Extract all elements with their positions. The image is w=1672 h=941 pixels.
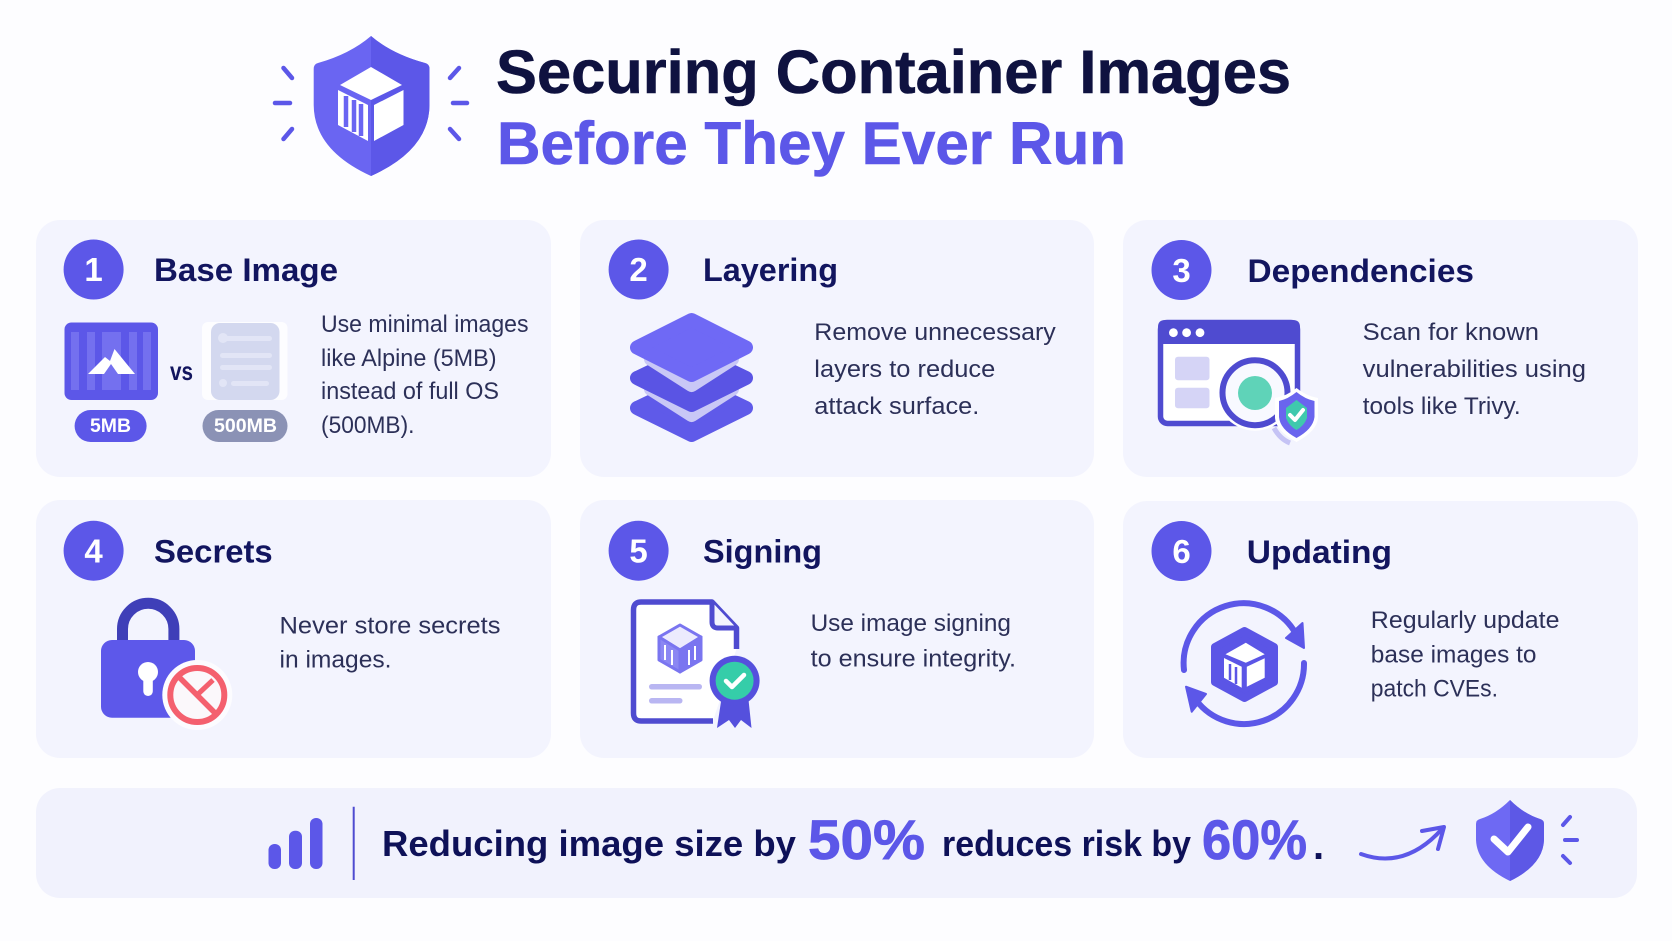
badge: 5MB: 5MB xyxy=(90,416,131,437)
text: updating tip: patch CVEs. xyxy=(1371,676,1498,703)
text: secrets tip: Never store secrets xyxy=(280,612,500,640)
text: signing tip: to ensure integrity. xyxy=(811,646,1016,673)
text: secrets tip xyxy=(280,612,500,674)
step number 3: 3 xyxy=(1172,252,1191,289)
header icon: shield with container xyxy=(275,36,467,176)
heading: Layering: Layering xyxy=(703,252,838,288)
icon: stacked layers xyxy=(637,320,746,435)
icon: signed document with ribbon xyxy=(634,602,760,728)
text: dependencies tip: Scan for known xyxy=(1363,319,1539,346)
text: dependencies tip: vulnerabilities using xyxy=(1363,356,1586,383)
badge: 500MB xyxy=(202,410,288,442)
text: base image tip xyxy=(321,311,528,439)
step number 6: 6 xyxy=(1172,533,1191,570)
heading: Dependencies: Dependencies xyxy=(1248,253,1474,289)
text: updating tip: base images to xyxy=(1371,642,1536,669)
text: layering tip xyxy=(814,319,1057,420)
icon: bar chart xyxy=(268,818,322,869)
statistic text: 50% xyxy=(808,808,925,871)
panel: secrets xyxy=(36,500,551,758)
text: layering tip: attack surface. xyxy=(814,393,979,420)
text: layering tip: layers to reduce xyxy=(814,356,995,383)
arrow xyxy=(1361,827,1444,858)
text: base image tip: Use minimal images xyxy=(321,311,528,338)
panel: updating xyxy=(1123,501,1638,758)
text: dependencies tip: tools like Trivy. xyxy=(1363,393,1521,420)
heading: Secrets: Secrets xyxy=(154,534,273,570)
icon: update cycle around container xyxy=(1184,603,1304,724)
badge: 500MB: 500MB xyxy=(214,416,277,437)
icon: browser scan with shield xyxy=(1158,320,1318,443)
panel: signing xyxy=(580,500,1094,758)
icon: shield with check xyxy=(1476,800,1577,881)
heading: Signing: Signing xyxy=(703,534,822,570)
title xyxy=(496,38,1291,177)
text: updating tip: Regularly update xyxy=(1371,607,1560,634)
heading: Base Image: Base Image xyxy=(154,252,338,288)
text: signing tip: Use image signing xyxy=(811,610,1011,637)
icon: large full OS image xyxy=(202,322,288,400)
step number 4: 4 xyxy=(84,532,103,570)
text: base image tip: instead of full OS xyxy=(321,378,499,405)
panel: layering xyxy=(580,220,1094,477)
step number 2: 2 xyxy=(629,251,648,288)
statistic text xyxy=(382,808,1324,871)
step number 3 xyxy=(1152,240,1212,300)
title: Before They Ever Run xyxy=(497,110,1126,177)
step number 2 xyxy=(609,240,669,300)
statistic text: . xyxy=(1313,824,1324,868)
icon: padlock with prohibition sign xyxy=(101,603,232,730)
statistic text: Reducing image size by xyxy=(382,823,796,864)
text: base image tip: (500MB). xyxy=(321,412,414,439)
statistic text: reduces risk by xyxy=(942,823,1191,864)
step number 4 xyxy=(64,521,124,581)
vs label: vs xyxy=(170,356,193,386)
step number 5 xyxy=(609,521,669,581)
text: layering tip: Remove unnecessary xyxy=(814,319,1057,346)
heading: Updating: Updating xyxy=(1247,534,1392,570)
badge: 5MB xyxy=(75,410,147,442)
step number 1 xyxy=(64,240,124,300)
text: base image tip: like Alpine (5MB) xyxy=(321,345,496,372)
text: updating tip xyxy=(1371,607,1560,703)
title: Securing Container Images xyxy=(496,38,1291,106)
step number 1: 1 xyxy=(84,251,103,288)
text: dependencies tip xyxy=(1363,319,1586,420)
panel: dependencies xyxy=(1123,220,1638,477)
text: secrets tip: in images. xyxy=(280,647,392,674)
step number 6 xyxy=(1152,521,1212,581)
panel: base image xyxy=(36,220,551,477)
text: signing tip xyxy=(811,610,1016,673)
icon: small Alpine image xyxy=(64,322,158,400)
step number 5: 5 xyxy=(629,532,648,570)
statistic text: 60% xyxy=(1202,808,1307,871)
panel: key statistic banner xyxy=(36,788,1637,898)
